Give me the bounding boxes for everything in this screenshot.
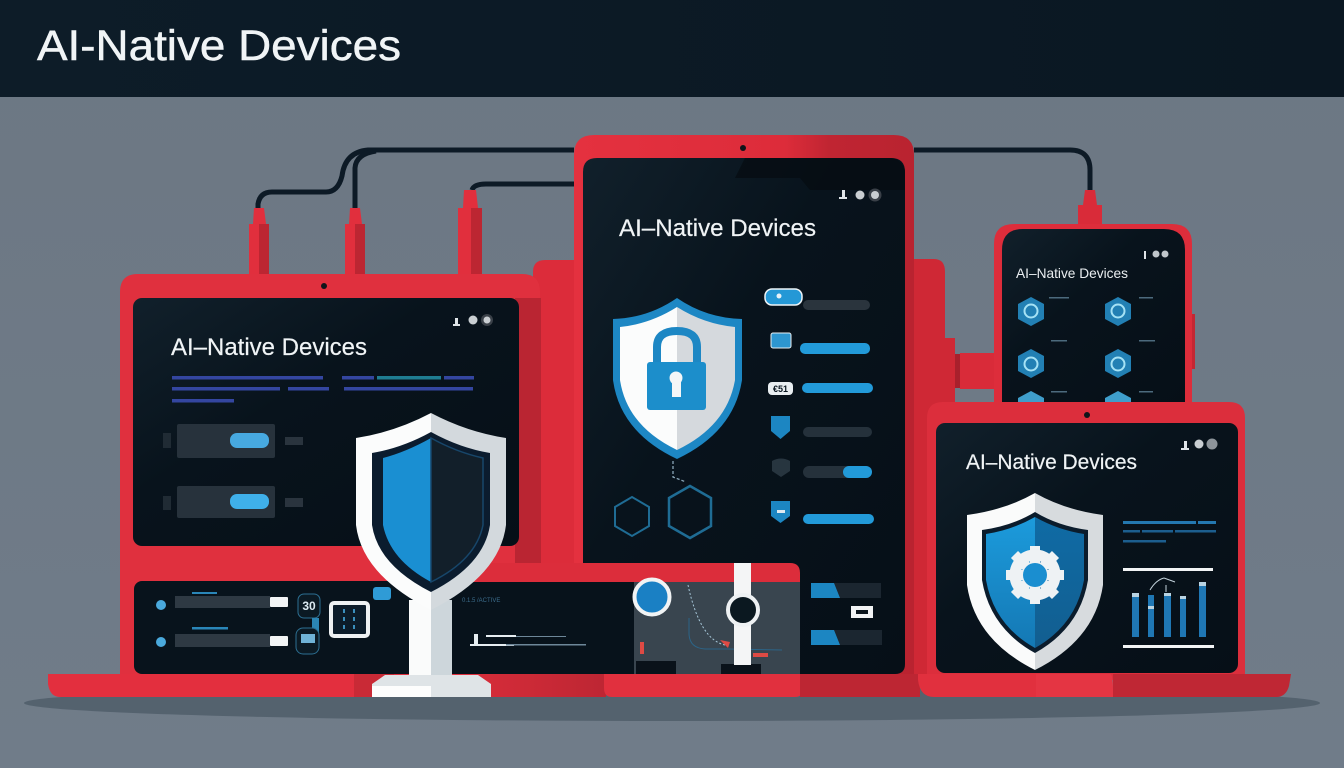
- large shield on stand: [356, 413, 506, 697]
- phone: upper right: [994, 224, 1195, 413]
- list row 2: [771, 333, 870, 354]
- white pole with ring: [728, 563, 758, 665]
- control row one: [163, 424, 303, 458]
- dark section: [452, 582, 634, 674]
- heading: AI–Native Devices: [619, 215, 816, 242]
- ground shadow: [24, 685, 1320, 721]
- tablet: left: [120, 274, 541, 690]
- header bar: [0, 0, 1344, 97]
- heading: AI–Native Devices: [1016, 266, 1128, 281]
- screen: [936, 423, 1238, 673]
- lower middle module: [452, 563, 800, 674]
- text lines: [1123, 521, 1216, 542]
- hexagon small: [615, 497, 649, 536]
- grey section: [634, 582, 800, 674]
- dashed link: [673, 461, 686, 482]
- plug two: [345, 208, 365, 274]
- shield body: [356, 413, 431, 610]
- bottom right status bars: [811, 583, 882, 645]
- lower left panel: [134, 581, 464, 674]
- status icons: [839, 188, 882, 202]
- bezel: [574, 135, 914, 690]
- list row 3: [768, 382, 873, 395]
- cables: [258, 150, 1090, 208]
- tiny readout text: [462, 598, 586, 646]
- status icons: [453, 314, 493, 326]
- tablet: centre: [574, 135, 914, 690]
- title: AI-Native Devices: [37, 22, 401, 70]
- hex icons: [1018, 297, 1155, 413]
- screen: [133, 298, 519, 546]
- bezel: [120, 274, 540, 690]
- blue knob: [634, 580, 670, 614]
- list row 5: [772, 458, 872, 478]
- gear shield: [967, 493, 1103, 670]
- gear: [1006, 546, 1064, 604]
- badge 30: [298, 594, 320, 634]
- bezel: [927, 402, 1245, 680]
- red top band: [464, 563, 800, 582]
- lock shield: [613, 298, 742, 459]
- plug one: [249, 208, 269, 274]
- tiny readout text: 0.1.5 /ACTIVE: [462, 598, 500, 604]
- plug four: [1078, 190, 1102, 224]
- heading: AI–Native Devices: [171, 334, 367, 361]
- bar chart: [1123, 568, 1214, 648]
- status row two: [156, 627, 288, 647]
- cable plugs: [249, 190, 1102, 274]
- framed chip: [331, 603, 368, 636]
- list row 4: [771, 416, 872, 439]
- padlock: [647, 331, 706, 410]
- list row 3: €51: [773, 384, 788, 394]
- plug three: [458, 190, 482, 274]
- device base: [48, 674, 1291, 697]
- blue tag: [373, 587, 391, 600]
- side bracket: centre left: [533, 260, 576, 680]
- heading: AI–Native Devices: [966, 451, 1137, 474]
- red markers: [640, 640, 768, 657]
- text lines: [172, 376, 474, 402]
- list row 6: [771, 501, 874, 524]
- badge 30: 30: [302, 599, 316, 613]
- status row one: [156, 592, 288, 610]
- status icons: [1181, 438, 1218, 450]
- status icons: [1144, 250, 1168, 259]
- control row two: [163, 486, 303, 518]
- screen: [1002, 229, 1185, 402]
- curve lines: [688, 585, 725, 645]
- tablet: lower right: [927, 402, 1245, 680]
- side bracket: centre right: [912, 259, 955, 680]
- stand: [372, 600, 491, 697]
- badge lower: [296, 628, 319, 654]
- list row 1: [765, 289, 870, 310]
- screen: [583, 158, 905, 674]
- bezel: [994, 224, 1192, 402]
- connector between centre tablet and phone: [955, 353, 996, 389]
- hexagon large: [669, 486, 711, 538]
